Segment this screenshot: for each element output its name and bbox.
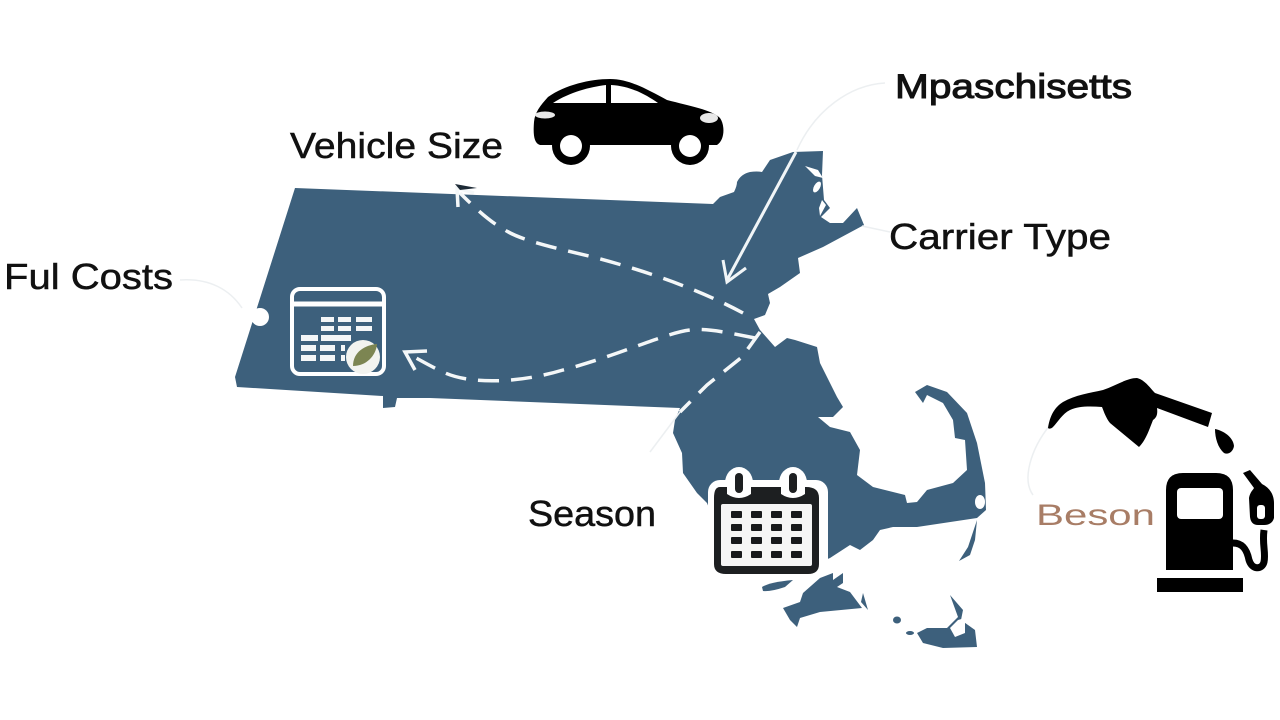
label: Vehicle Size: Vehicle Size: [290, 125, 503, 166]
faint leader lines: [180, 83, 1050, 495]
map cut-outs: [805, 166, 985, 637]
icon: car: [534, 79, 723, 165]
icon: calendar on map: [292, 289, 384, 374]
label: Season: Season: [528, 493, 656, 534]
icon: fuel pump: [1157, 470, 1274, 592]
cape cod east sliver: [959, 520, 977, 561]
mainland silhouette: [235, 151, 986, 575]
map: Massachusetts: [235, 151, 986, 648]
sliver island: [762, 580, 793, 591]
Nantucket: [917, 595, 977, 648]
icon: large calendar: [708, 467, 828, 578]
label: Fuel Costs: Ful Costs: [4, 256, 173, 297]
north shore islets: [805, 166, 823, 178]
Cape Ann inlet: [819, 200, 826, 216]
Muskeget: [906, 631, 914, 635]
Tuckernuck: [893, 616, 901, 624]
label: Massachusetts: Mpaschisetts: [895, 68, 1132, 106]
label: garbled Season: Beson: [1036, 499, 1155, 532]
pond on the cape: [975, 495, 985, 509]
Nantucket harbor: [950, 618, 965, 637]
white location marker: [251, 308, 269, 326]
icon: leaf badge: [346, 340, 380, 374]
route arrow: Season: [680, 332, 760, 412]
label: Carrier Type: Carrier Type: [889, 216, 1111, 257]
route arrow: Fuel Costs: [405, 329, 755, 381]
Martha's Vineyard: [783, 573, 862, 627]
Plum Island: [811, 180, 823, 194]
solid arrow from Massachusetts label: [723, 152, 796, 282]
icon: fuel nozzle: [1048, 378, 1234, 454]
Chappaquiddick: [861, 593, 868, 610]
route arrow: Vehicle Size: [455, 184, 743, 313]
